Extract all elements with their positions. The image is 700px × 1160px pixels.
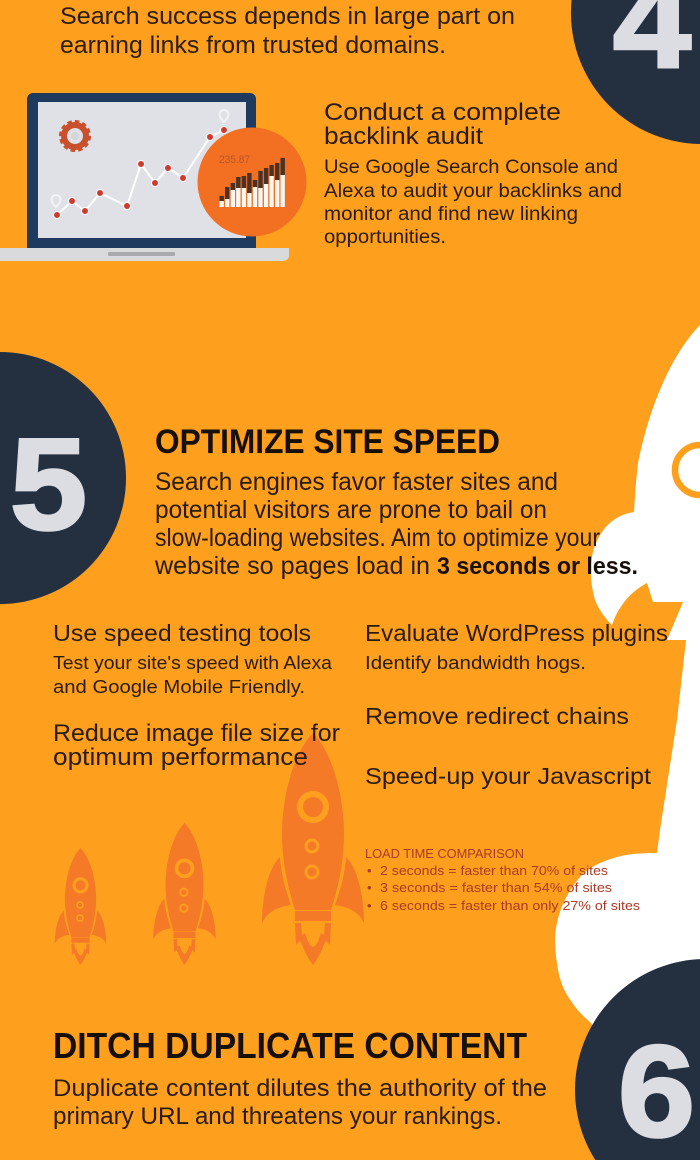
section 5 intro text: potential visitors are prone to bail on	[155, 496, 547, 524]
backlink audit block	[324, 99, 622, 248]
section 5 intro text	[154, 468, 638, 580]
tip: speed testing tools	[53, 620, 333, 697]
tip: reduce image size: Reduce image file size for	[53, 720, 340, 747]
number badge 4	[571, 0, 700, 144]
white rocket silhouette	[555, 325, 700, 1160]
trackpad slot	[108, 252, 175, 256]
tip: speed testing tools: Use speed testing tools	[53, 620, 311, 646]
tip: speed testing tools: Test your site's speed with Alexa	[53, 653, 333, 673]
tip: speed testing tools: and Google Mobile Friendly.	[53, 677, 305, 697]
number badge 5: 5	[10, 411, 87, 557]
section 6 text: primary URL and threatens your rankings.	[53, 1103, 502, 1130]
tip: reduce image size: optimum performance	[53, 744, 308, 771]
rocket medium	[153, 823, 216, 965]
laptop frame	[27, 93, 256, 253]
load time comparison: •	[367, 880, 372, 895]
tip: Javascript: Speed-up your Javascript	[365, 763, 652, 789]
section 4 intro text: Search success depends in large part on	[60, 3, 515, 30]
section 5 intro text: website so pages load in	[154, 552, 430, 580]
section 4 intro text	[60, 3, 515, 59]
rocket small	[55, 848, 106, 965]
map pin end	[220, 110, 228, 122]
load time comparison	[365, 846, 641, 913]
section 5 intro text: slow-loading websites. Aim to optimize your	[155, 524, 600, 552]
ring on white rocket	[675, 445, 700, 495]
number badge 5	[0, 352, 126, 604]
load time comparison: •	[367, 898, 372, 913]
load time comparison: 6 seconds = faster than only 27% of sites	[380, 898, 641, 913]
load time comparison: •	[367, 863, 372, 878]
backlink audit text: Use Google Search Console and	[324, 157, 618, 178]
tip: WordPress plugins: Identify bandwidth hogs.	[365, 653, 586, 673]
section 6 text: Duplicate content dilutes the authority of the	[53, 1075, 547, 1102]
laptop base	[0, 248, 289, 261]
tip: reduce image size	[53, 720, 340, 771]
backlink audit heading	[324, 99, 561, 150]
section 4 intro text: earning links from trusted domains.	[60, 32, 446, 59]
backlink audit text: opportunities.	[324, 227, 446, 248]
laptop illustration	[0, 93, 306, 261]
backlink audit text: monitor and find new linking	[324, 204, 578, 225]
number badge 6	[575, 959, 700, 1160]
backlink audit text: Alexa to audit your backlinks and	[324, 181, 622, 202]
load time comparison: 2 seconds = faster than 70% of sites	[380, 863, 609, 878]
section 5 intro text: 3 seconds or less.	[437, 553, 638, 580]
line chart	[54, 126, 228, 218]
backlink audit text	[324, 157, 622, 248]
map pin start	[52, 195, 60, 207]
orange chart circle	[198, 128, 306, 236]
number badge 6: 6	[618, 1018, 695, 1160]
gear icon	[61, 122, 89, 150]
backlink audit heading: backlink audit	[324, 123, 483, 150]
section 5 heading: OPTIMIZE SITE SPEED	[155, 423, 500, 461]
section 5 intro text: Search engines favor faster sites and	[155, 468, 558, 496]
backlink audit heading: Conduct a complete	[324, 99, 561, 126]
tip: redirect chains: Remove redirect chains	[365, 703, 629, 729]
chart value: 235.87	[219, 154, 250, 166]
bar chart	[220, 158, 285, 207]
section 6 text	[53, 1075, 547, 1130]
tip: WordPress plugins: Evaluate WordPress plugins	[365, 620, 668, 646]
rocket large	[262, 733, 364, 965]
load time comparison: 3 seconds = faster than 54% of sites	[380, 880, 613, 895]
load time comparison: LOAD TIME COMPARISON	[365, 846, 524, 861]
tip: WordPress plugins	[365, 620, 668, 673]
section 6 heading: DITCH DUPLICATE CONTENT	[53, 1025, 527, 1066]
laptop screen	[38, 102, 246, 238]
